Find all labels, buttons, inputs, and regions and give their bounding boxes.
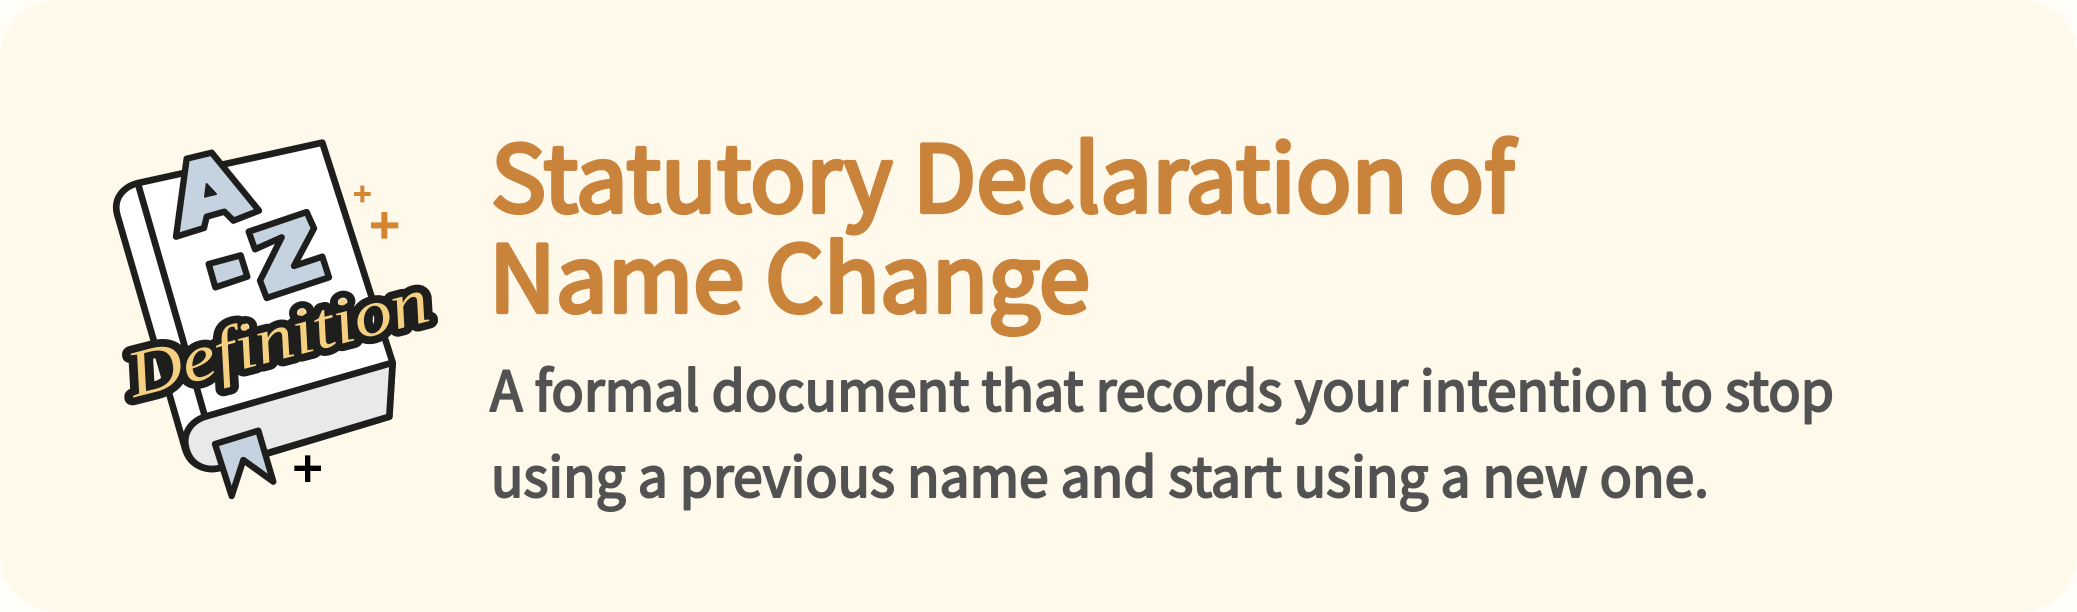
book spine line: [138, 185, 205, 417]
letter dash: [209, 255, 247, 287]
icon: black plus: [294, 455, 321, 482]
title: [489, 106, 1517, 339]
book page block: [185, 363, 393, 469]
icon: small orange plus: [354, 186, 371, 202]
letter Z: [249, 212, 329, 298]
letter A: [176, 153, 259, 237]
title line 2: Name Change: [489, 206, 1090, 339]
book cover: [116, 143, 393, 469]
inner triangle of A: [205, 184, 216, 197]
icon: large orange plus: [371, 212, 398, 239]
description line 2: using a previous name and start using a new one.: [491, 433, 1709, 513]
title line 1: Statutory Declaration of: [491, 106, 1517, 239]
script word Definition: Definition: [118, 264, 436, 412]
description text: [490, 347, 1834, 513]
description line 1: A formal document that records your intention to stop: [490, 347, 1834, 427]
icon: A-Z definition book: [116, 143, 436, 496]
bookmark: [215, 431, 273, 496]
